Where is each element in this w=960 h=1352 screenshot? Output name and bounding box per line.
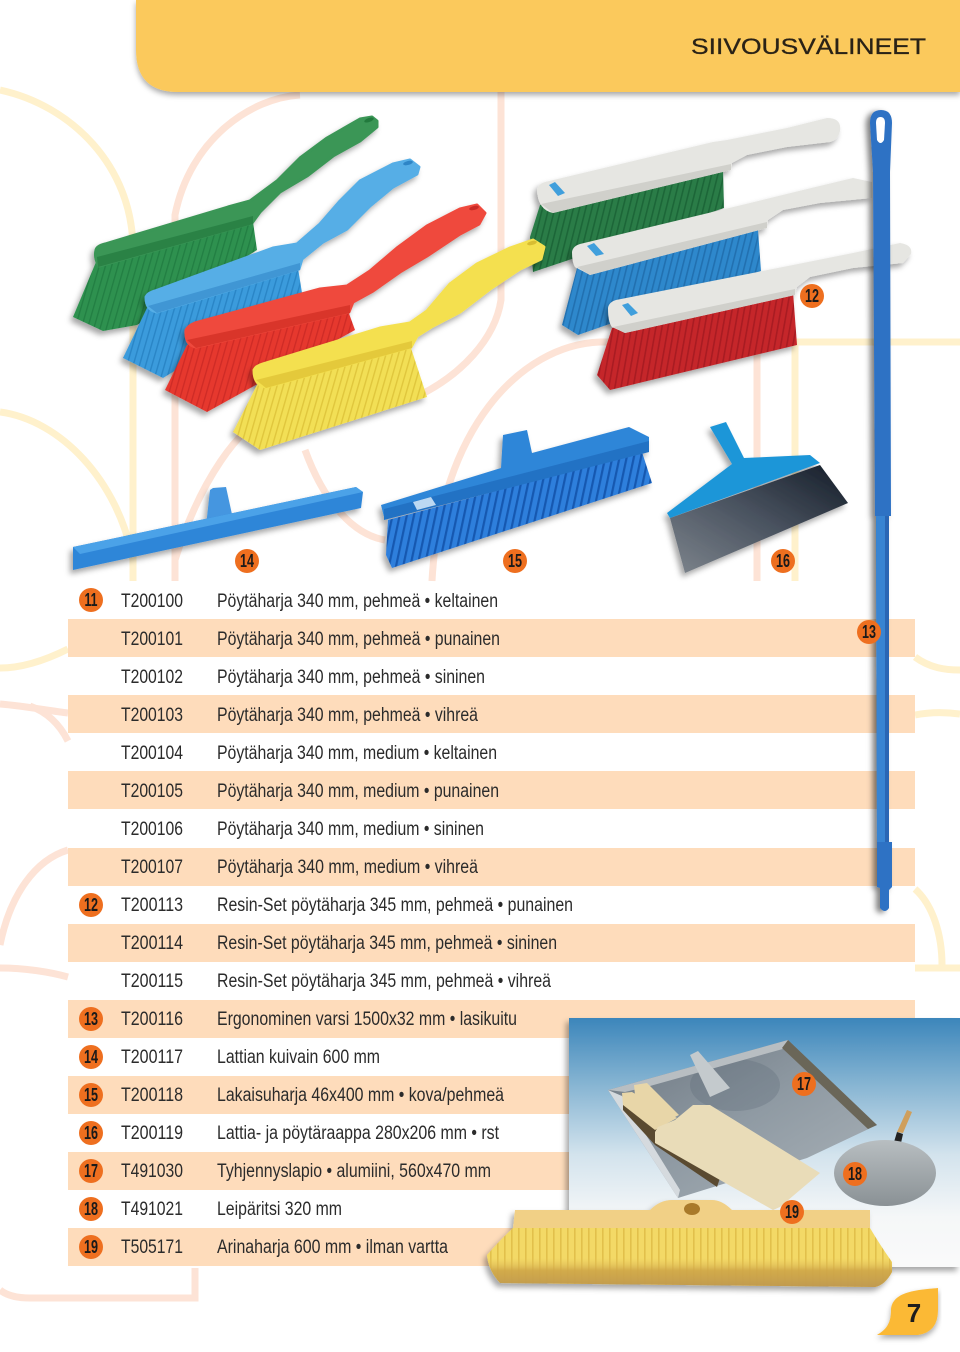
row T200114: T200114 (121, 933, 183, 954)
row T200117: Lattian kuivain 600 mm (217, 1047, 380, 1068)
badge 16: 16 (84, 1123, 98, 1143)
badge 12 (800, 284, 824, 308)
badge 13 on pole (857, 620, 881, 644)
row T200105 (121, 781, 499, 802)
row T200104: T200104 (121, 743, 183, 764)
row T200119: Lattia- ja pöytäraappa 280x206 mm • rst (217, 1123, 500, 1144)
title: SIIVOUSVÄLINEET (691, 34, 926, 59)
row T200115 (121, 971, 551, 992)
row T200113: T200113 (121, 895, 183, 916)
badge 16: 16 (776, 551, 790, 571)
row T200116: Ergonominen varsi 1500x32 mm • lasikuitu (217, 1009, 517, 1030)
row T200100: T200100 (121, 591, 183, 612)
row T200114: Resin-Set pöytäharja 345 mm, pehmeä • sininen (217, 933, 557, 954)
squeegee (73, 487, 363, 570)
page number leaf (877, 1288, 938, 1335)
wooden squeegee (622, 1083, 820, 1210)
badge 16 (771, 549, 795, 573)
badge 14: 14 (84, 1047, 98, 1067)
row T200118: T200118 (121, 1085, 183, 1106)
white-backed red brush (597, 243, 911, 390)
row T200102: Pöytäharja 340 mm, pehmeä • sininen (217, 667, 485, 688)
product badges on images (235, 284, 824, 573)
floor scraper (667, 422, 848, 573)
badge 13 (79, 1007, 103, 1031)
yellow broom (487, 1200, 892, 1287)
row T200107 (121, 857, 478, 878)
badge 18 (79, 1197, 103, 1221)
row T200103: Pöytäharja 340 mm, pehmeä • vihreä (217, 705, 478, 726)
row T200106 (121, 819, 484, 840)
row T200113 (121, 895, 573, 916)
row T505171: T505171 (121, 1237, 183, 1258)
table number badges (79, 588, 103, 1259)
badge 13: 13 (84, 1009, 98, 1029)
row T491021: T491021 (121, 1199, 183, 1220)
yellow hand brush (233, 240, 544, 450)
dustpan tray (608, 1040, 877, 1198)
row T200101: T200101 (121, 629, 183, 650)
row T200119: T200119 (121, 1123, 183, 1144)
header band (136, 0, 960, 92)
row T200119 (121, 1123, 500, 1144)
row T491030: T491030 (121, 1161, 183, 1182)
badge 11: 11 (84, 590, 98, 610)
row T491021 (121, 1199, 342, 1220)
row T200118 (121, 1085, 504, 1106)
page number: 7 (907, 1298, 921, 1328)
row T200115: T200115 (121, 971, 183, 992)
row T200107: T200107 (121, 857, 183, 878)
badge 19: 19 (785, 1202, 799, 1222)
row T200114 (121, 933, 557, 954)
row T200102 (121, 667, 485, 688)
badge 17 (792, 1072, 816, 1096)
row T200105: Pöytäharja 340 mm, medium • punainen (217, 781, 499, 802)
product table (68, 591, 915, 1266)
round peel (834, 1110, 936, 1206)
row T505171: Arinaharja 600 mm • ilman vartta (217, 1237, 448, 1258)
row T200118: Lakaisuharja 46x400 mm • kova/pehmeä (217, 1085, 504, 1106)
badge 14: 14 (240, 551, 254, 571)
row bands (68, 619, 915, 1266)
floor brush (381, 427, 652, 568)
row T505171 (121, 1237, 448, 1258)
badge 19 (79, 1235, 103, 1259)
badge 18 (843, 1162, 867, 1186)
badge 16 (79, 1121, 103, 1145)
badge 17: 17 (797, 1074, 811, 1094)
badge 15: 15 (84, 1085, 98, 1105)
badge 18: 18 (84, 1199, 98, 1219)
badge 12: 12 (805, 286, 819, 306)
badge 17 (79, 1159, 103, 1183)
row T200116: T200116 (121, 1009, 183, 1030)
row T200104 (121, 743, 497, 764)
row T200106: Pöytäharja 340 mm, medium • sininen (217, 819, 484, 840)
badge 12 (79, 893, 103, 917)
row T200115: Resin-Set pöytäharja 345 mm, pehmeä • vihreä (217, 971, 551, 992)
row T200100 (121, 591, 498, 612)
badge 15 (503, 549, 527, 573)
blue hand brush (123, 160, 419, 378)
badge 19 (780, 1200, 804, 1224)
row T200100: Pöytäharja 340 mm, pehmeä • keltainen (217, 591, 498, 612)
row T200103: T200103 (121, 705, 183, 726)
badge 14 (235, 549, 259, 573)
badge 15: 15 (508, 551, 522, 571)
row T200105: T200105 (121, 781, 183, 802)
badge 11 (79, 588, 103, 612)
row T491030: Tyhjennyslapio • alumiini, 560x470 mm (217, 1161, 491, 1182)
white-backed green brush (530, 118, 840, 272)
row T200107: Pöytäharja 340 mm, medium • vihreä (217, 857, 478, 878)
badge 17: 17 (84, 1161, 98, 1181)
row T200101 (121, 629, 500, 650)
green hand brush (73, 116, 377, 331)
row T200117 (121, 1047, 380, 1068)
row T491030 (121, 1161, 491, 1182)
badge 13 on pole: 13 (862, 622, 876, 642)
row T200113: Resin-Set pöytäharja 345 mm, pehmeä • punainen (217, 895, 573, 916)
badge 15 (79, 1083, 103, 1107)
row T200106: T200106 (121, 819, 183, 840)
blue pole (870, 110, 892, 911)
badge 19: 19 (84, 1237, 98, 1257)
row T491021: Leipäritsi 320 mm (217, 1199, 342, 1220)
row T200102: T200102 (121, 667, 183, 688)
row T200116 (121, 1009, 517, 1030)
row T200117: T200117 (121, 1047, 183, 1068)
row T200104: Pöytäharja 340 mm, medium • keltainen (217, 743, 497, 764)
white-backed blue brush (562, 178, 872, 335)
row T200103 (121, 705, 478, 726)
row T200101: Pöytäharja 340 mm, pehmeä • punainen (217, 629, 500, 650)
badge 14 (79, 1045, 103, 1069)
badge 18: 18 (848, 1164, 862, 1184)
photo: aluminium tools on blue backdrop (487, 1018, 960, 1287)
red hand brush (165, 205, 485, 412)
badge 12: 12 (84, 895, 98, 915)
